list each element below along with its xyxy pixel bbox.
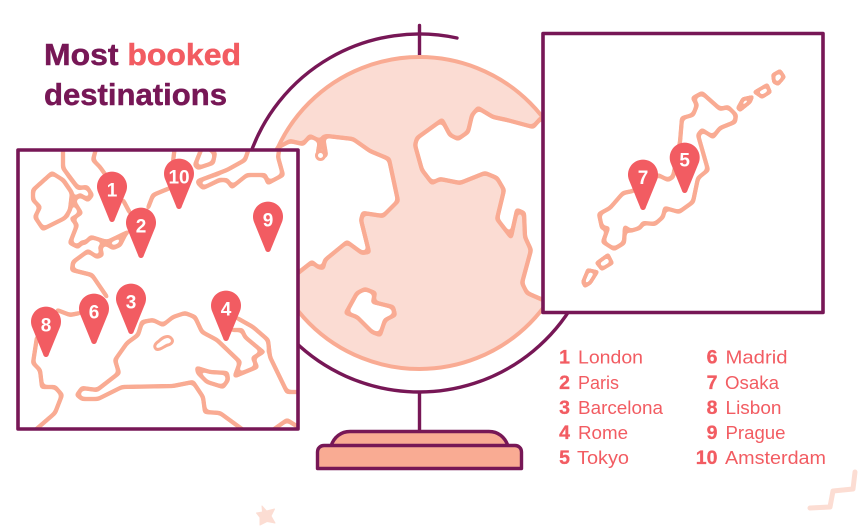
- pin 3 Barcelona: [116, 284, 146, 334]
- Tokyo: 5: [559, 447, 570, 469]
- Barcelona: Barcelona: [578, 397, 664, 418]
- Paris: [559, 372, 619, 394]
- Japan map frame: [543, 34, 823, 312]
- title line 2: destinations: [44, 77, 227, 112]
- Tokyo: Tokyo: [577, 447, 629, 468]
- Europe map background: [18, 150, 298, 429]
- Japan main islands: [599, 93, 736, 249]
- Osaka: 7: [707, 372, 718, 394]
- pin 10 Amsterdam: [164, 159, 194, 209]
- panel: Japan map: [543, 34, 823, 312]
- pin 1 London: [97, 172, 127, 222]
- globe illustration: [240, 26, 576, 468]
- Paris: 2: [559, 372, 570, 394]
- legend: destinations 1 to 5: [559, 346, 664, 469]
- London: 1: [559, 346, 570, 368]
- Lisbon: Lisbon: [726, 397, 782, 418]
- pin 6 Madrid: [79, 294, 109, 344]
- Amsterdam: 10: [696, 447, 718, 469]
- Japan map background: [543, 34, 823, 312]
- pin 10 Amsterdam: 10: [168, 168, 190, 188]
- title: [44, 37, 241, 112]
- Rome: [559, 422, 628, 444]
- Amsterdam: Amsterdam: [725, 447, 826, 468]
- globe top pin: [418, 26, 421, 56]
- stand base top: [331, 432, 508, 446]
- pin 4 Rome: [211, 291, 241, 341]
- globe coastlines: [270, 108, 570, 335]
- globe meridian arc: [240, 34, 574, 392]
- Lisbon: 8: [707, 397, 718, 419]
- pin 7 Osaka: 7: [638, 168, 648, 189]
- Prague: Prague: [726, 422, 786, 443]
- globe stand pole: [418, 392, 421, 432]
- pin 9 Prague: [253, 202, 283, 252]
- legend: destinations 6 to 10: [696, 346, 826, 469]
- Europe map frame: [18, 150, 298, 429]
- pin 8 Lisbon: 8: [41, 316, 51, 336]
- Madrid: 6: [707, 346, 718, 368]
- Rome: Rome: [578, 422, 628, 443]
- pin 9 Prague: 9: [263, 210, 273, 232]
- pin 5 Tokyo: [670, 143, 700, 193]
- globe oceans fill: [270, 108, 570, 335]
- Corsica island: [155, 337, 172, 349]
- Paris: Paris: [578, 372, 619, 393]
- pin 4 Rome: 4: [221, 300, 232, 320]
- Prague: 9: [707, 422, 718, 444]
- Lisbon: [707, 397, 782, 419]
- Japan small islands: [583, 71, 784, 286]
- globe coast lobe: [316, 152, 324, 160]
- pin 2 Paris: 2: [136, 216, 146, 238]
- pin 7 Osaka: [628, 160, 658, 210]
- pin 8 Lisbon: [31, 307, 61, 357]
- Amsterdam: [696, 447, 826, 469]
- stand base bottom: [318, 446, 522, 468]
- decorative star: [256, 506, 275, 525]
- pin 1 London: 1: [107, 180, 118, 202]
- London: London: [578, 346, 643, 368]
- title line 1: Most booked: [44, 37, 241, 72]
- Osaka: Osaka: [725, 372, 780, 393]
- Rome: 4: [559, 422, 570, 444]
- Europe coastlines: [33, 145, 303, 432]
- decorative zigzag: [810, 472, 855, 508]
- Osaka: [707, 372, 780, 394]
- pin 5 Tokyo: 5: [679, 150, 690, 172]
- pin 2 Paris: [126, 208, 156, 258]
- pin 3 Barcelona: 3: [126, 292, 136, 314]
- Barcelona: 3: [559, 397, 570, 419]
- panel: Europe map: [18, 145, 303, 432]
- pin 6 Madrid: 6: [89, 302, 99, 324]
- Madrid: [707, 346, 788, 368]
- Tokyo: [559, 447, 629, 469]
- Madrid: Madrid: [726, 346, 788, 368]
- globe sphere: [264, 57, 576, 369]
